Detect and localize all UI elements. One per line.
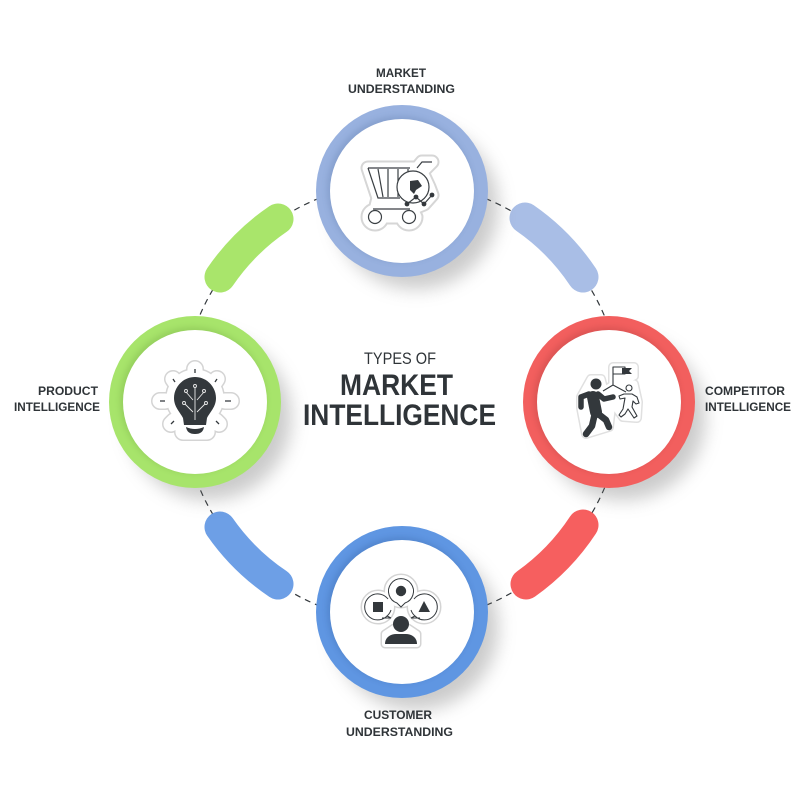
label: competitor intelligence: COMPETITOR: [705, 386, 786, 398]
label: product intelligence: INTELLIGENCE: [14, 402, 100, 414]
label: competitor intelligence: INTELLIGENCE: [705, 402, 791, 414]
icon: shopping cart with globe: [368, 162, 434, 224]
label: market understanding: [348, 68, 455, 96]
arc segment: green: [220, 219, 278, 277]
icon: customer with speech bubbles: [365, 578, 437, 644]
label: product intelligence: [14, 386, 100, 414]
title: MARKET: [340, 369, 453, 402]
panel: market understanding circle: [316, 105, 498, 289]
title: [303, 349, 496, 432]
panel: customer understanding circle: [316, 526, 498, 710]
arc segment: blue: [220, 527, 278, 584]
label: customer understanding: UNDERSTANDING: [346, 727, 453, 739]
label: product intelligence: PRODUCT: [38, 386, 98, 398]
label: competitor intelligence: [705, 386, 791, 414]
label: market understanding: MARKET: [376, 68, 426, 80]
arc segment: blue-grey: [525, 218, 583, 277]
label: market understanding: UNDERSTANDING: [348, 84, 455, 96]
dashed connector ring: [182, 182, 622, 622]
panel: product intelligence circle: [109, 316, 291, 500]
icon: light bulb with circuit: [160, 369, 231, 434]
icon: runner chasing competitor to flag: [581, 367, 639, 434]
arc segment: red: [526, 525, 583, 584]
title: INTELLIGENCE: [303, 399, 496, 432]
label: customer understanding: CUSTOMER: [364, 710, 433, 722]
label: customer understanding: [346, 710, 453, 739]
panel: competitor intelligence circle: [523, 316, 705, 500]
title: TYPES OF: [364, 349, 436, 368]
